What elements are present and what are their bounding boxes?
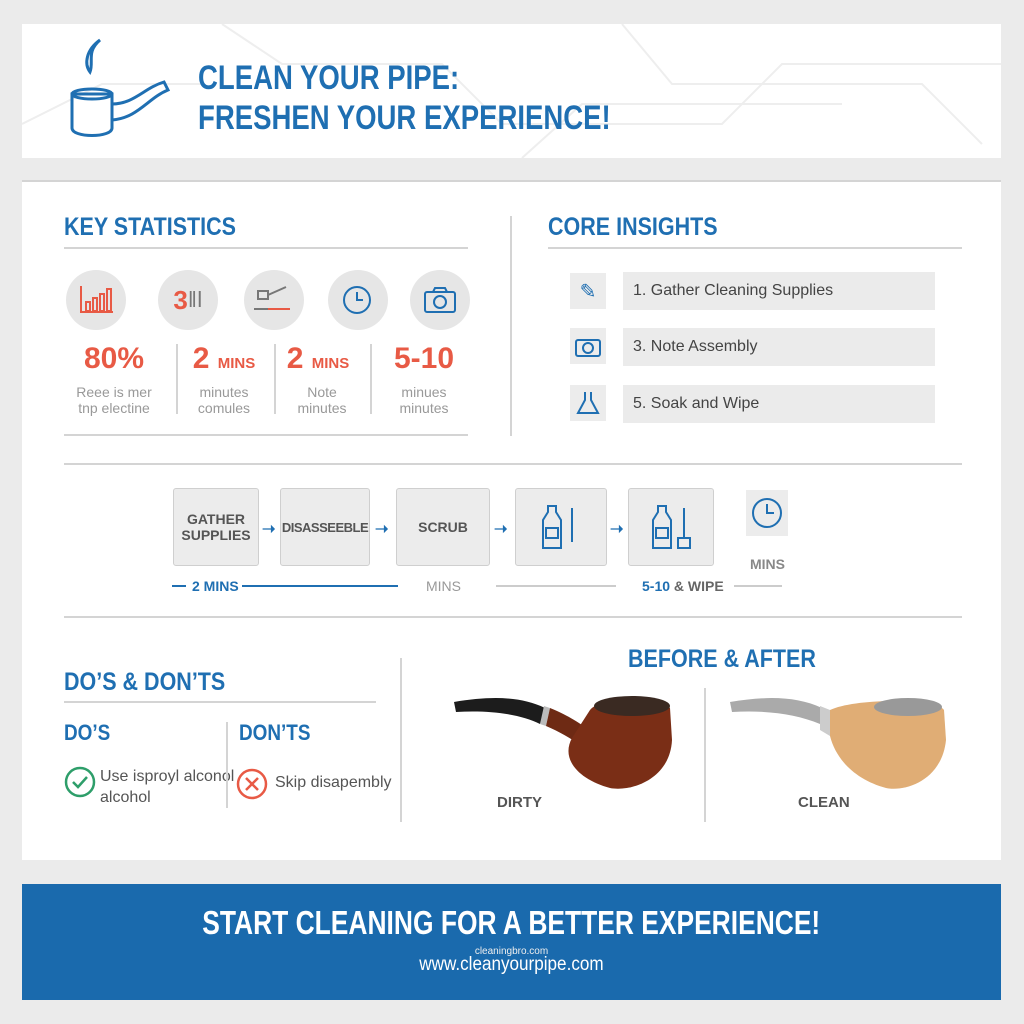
do's column: alcohol (100, 789, 151, 806)
icon: flask (570, 385, 606, 421)
process flow: DISASSEEBLE (282, 520, 368, 534)
image: clean pipe (730, 698, 946, 789)
icon: cross (236, 768, 268, 800)
insight 5 (623, 385, 935, 423)
process flow: ➝ (262, 521, 275, 538)
image: dirty pipe (454, 696, 672, 789)
stats panel: minutes (297, 400, 347, 416)
process flow: SCRUB (418, 519, 468, 535)
do's column: DO’S (64, 720, 110, 745)
process flow: ➝ (375, 521, 388, 538)
stats panel: 5-10 (394, 342, 454, 375)
stats panel: tnp electine (78, 400, 150, 416)
icon: supplies (570, 273, 606, 309)
process flow: ➝ (610, 521, 623, 538)
icon: camera small (570, 328, 606, 364)
stats panel: 2 MINS (193, 342, 255, 375)
insight 3 (623, 328, 935, 366)
stats panel: 80% (84, 342, 144, 375)
title: FRESHEN YOUR EXPERIENCE! (198, 99, 611, 137)
don'ts column: DON’TS (239, 720, 310, 745)
insight 1 (623, 272, 935, 310)
process flow (173, 488, 788, 572)
stats panel: Reee is mer (76, 384, 152, 400)
text: CLEAN (798, 794, 850, 811)
icon: tools: 3 (173, 284, 188, 314)
don'ts column: Skip disapembly (275, 774, 392, 791)
insight list (570, 272, 935, 423)
stats panel: minutes (199, 384, 249, 400)
heading: before & after: BEFORE & AFTER (628, 645, 816, 673)
footer url: www.cleanyourpipe.com (419, 954, 604, 975)
timeline labels (172, 578, 782, 594)
process flow: MINS (750, 556, 785, 572)
stats panel: Note (307, 384, 337, 400)
don'ts column (236, 720, 392, 800)
insight 5: 5. Soak and Wipe (633, 395, 759, 412)
icon: supplies: ✎ (580, 280, 596, 302)
timeline labels: 2 MINS (192, 578, 239, 594)
heading: key statistics: KEY STATISTICS (64, 213, 236, 241)
process flow: SUPPLIES (181, 527, 251, 543)
footer banner: cleaningbro.com (475, 946, 548, 957)
footer headline: START CLEANING FOR A BETTER EXPERIENCE! (202, 904, 820, 941)
icon: camera (410, 270, 470, 330)
icon: tools: ‖ǀ (188, 287, 203, 312)
icon: tools (158, 270, 218, 330)
do's column (64, 720, 234, 806)
timeline labels: 5-10 & WIPE (642, 578, 724, 594)
icon: pipe tools (244, 270, 304, 330)
icon: pipe logo (70, 38, 170, 137)
icon: chart (66, 270, 126, 330)
heading: do's and don'ts: DO’S & DON’TS (64, 668, 225, 696)
process flow: GATHER (187, 511, 245, 527)
header panel (22, 24, 1001, 158)
footer banner (22, 884, 1001, 1000)
main panel (22, 180, 1001, 860)
stats panel: minues (401, 384, 447, 400)
stats panel: 2 MINS (287, 342, 349, 375)
title: CLEAN YOUR PIPE: (198, 59, 459, 97)
icon: clock (328, 270, 388, 330)
insight 1: 1. Gather Cleaning Supplies (633, 282, 833, 299)
insight 3: 3. Note Assembly (633, 338, 758, 355)
icon: check (64, 766, 96, 798)
heading: core insights: CORE INSIGHTS (548, 213, 718, 241)
title (198, 59, 611, 137)
stats panel (66, 270, 470, 416)
process flow: ➝ (494, 521, 507, 538)
stats panel: minutes (399, 400, 449, 416)
do's column: Use isproyl alconol (100, 768, 234, 785)
timeline labels: MINS (426, 578, 461, 594)
stats panel: comules (198, 400, 250, 416)
text: DIRTY (497, 794, 542, 811)
